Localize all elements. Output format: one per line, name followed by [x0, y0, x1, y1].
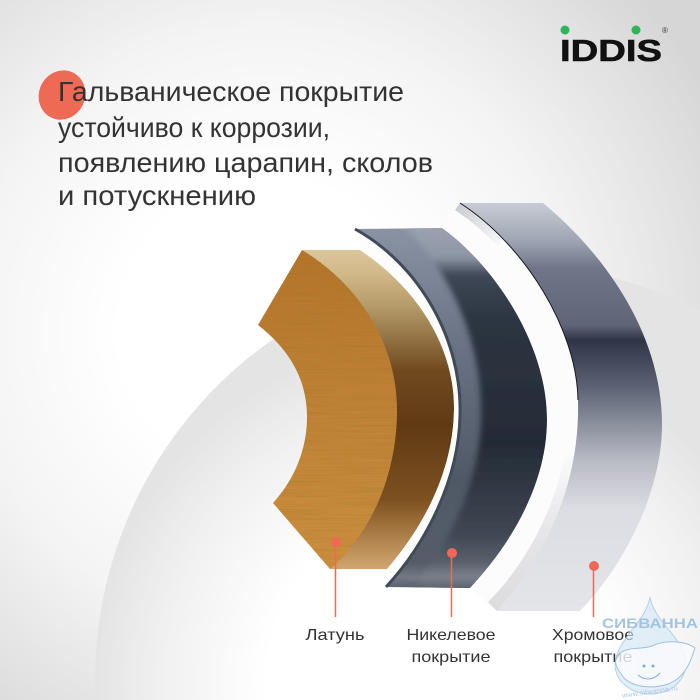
- nickel edge: [355, 229, 460, 587]
- watermark name: СИБВАННА: [602, 615, 698, 631]
- label: chrome: [552, 627, 634, 666]
- logo: IDDIS: IDDIS: [560, 33, 662, 68]
- chrome face: [460, 203, 662, 611]
- gap between brass and nickel: [355, 229, 460, 587]
- layer: brass: [250, 245, 454, 575]
- label: nickel: [406, 627, 496, 666]
- accent blob: [31, 63, 93, 127]
- chrome top shade: [455, 203, 505, 246]
- label: chrome: Хромовое: [552, 627, 634, 644]
- heading text: появлению царапин, сколов: [58, 147, 433, 178]
- chrome grey band: [488, 450, 576, 611]
- brushed texture: [260, 254, 396, 566]
- background disc: [95, 265, 700, 700]
- layer: nickel: [355, 222, 560, 595]
- logo: IDDIS: ®: [662, 26, 668, 35]
- watermark face: [638, 665, 660, 679]
- heading text: и потускнению: [58, 180, 256, 211]
- heading text: Гальваническое покрытие: [58, 76, 404, 107]
- marker: chrome: [589, 561, 599, 617]
- label: nickel: Никелевое: [406, 627, 496, 644]
- nickel dark face: [407, 228, 547, 588]
- heading text: [58, 76, 433, 211]
- layer: chrome: [442, 203, 662, 611]
- brass front face: [258, 250, 397, 569]
- watermark url: www.sibvanna.ru: [621, 685, 678, 700]
- chrome edge: [460, 203, 578, 400]
- nickel inner band: [355, 228, 547, 588]
- label: chrome: покрытие: [554, 649, 633, 666]
- label: nickel: покрытие: [412, 649, 491, 666]
- brass side: [302, 250, 454, 569]
- label: brass: Латунь: [306, 627, 364, 644]
- chrome white strip: [442, 203, 578, 611]
- marker: brass: [331, 537, 341, 617]
- heading text: устойчиво к коррозии,: [58, 112, 330, 143]
- watermark drop: [615, 597, 686, 694]
- marker: nickel: [447, 548, 457, 617]
- logo: IDDIS: [560, 26, 668, 68]
- watermark bath: [616, 642, 695, 687]
- watermark: Sibvanna: [602, 597, 698, 700]
